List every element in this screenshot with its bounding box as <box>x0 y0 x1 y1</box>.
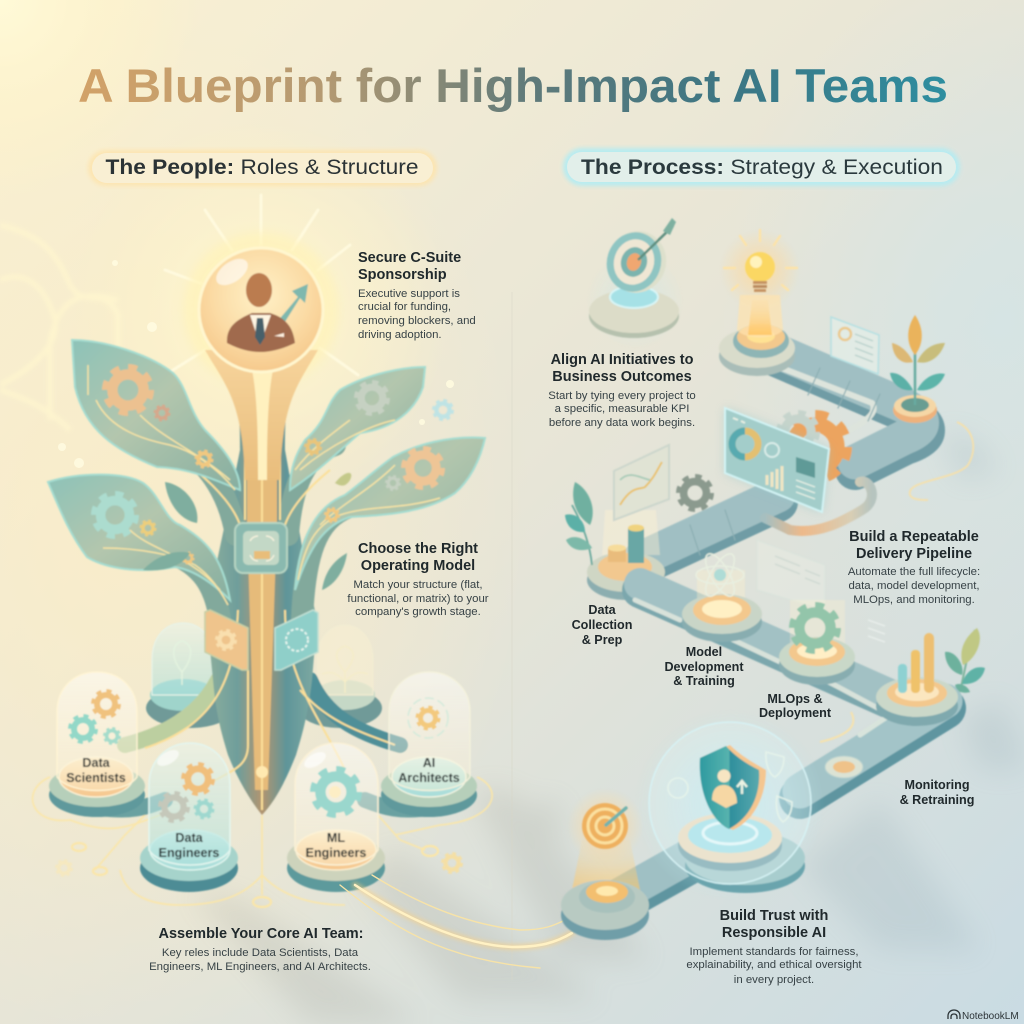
text: build trust with responsible ai <box>686 908 862 986</box>
pedestal: ai architects: AI <box>423 756 435 770</box>
shield icons in bubble <box>668 752 792 822</box>
notebooklm mark: NotebookLM <box>962 1011 1019 1022</box>
mlops pod <box>779 600 855 685</box>
trunk and roots <box>125 375 400 815</box>
base circuit lines <box>33 777 492 907</box>
text: align ai initiatives: a specific, measurable KPI <box>555 403 689 415</box>
text: choose the right operating model <box>347 541 489 618</box>
circuit gear right <box>443 854 461 872</box>
pedestal: data engineers: Engineers <box>159 846 219 860</box>
label: model development and training: & Training <box>673 674 735 688</box>
heading pill: the people: The People: Roles & Structure <box>106 156 418 179</box>
label: data collection and prep: Data <box>588 603 617 617</box>
text: build trust with responsible ai: in every project. <box>734 974 814 986</box>
data collection pod <box>565 482 665 600</box>
plant pod top <box>890 315 945 423</box>
label: model development and training: Model <box>686 645 722 659</box>
leaf branches <box>175 445 355 635</box>
text: secure c-suite sponsorship: Sponsorship <box>358 267 447 283</box>
pedestal connector bands <box>100 800 429 810</box>
pedestal: data engineers: Data <box>175 831 204 845</box>
target pod <box>561 840 649 940</box>
pedestal: ml engineers: ML <box>327 831 345 845</box>
text: choose the right operating model: Choose the Right <box>358 541 478 557</box>
pedestal: ai architects: Architects <box>398 771 460 785</box>
pedestal: data scientists: Data <box>82 756 111 770</box>
text: build a repeatable delivery pipeline: Build a Repeatable <box>849 529 979 545</box>
label: data collection and prep: & Prep <box>582 633 623 647</box>
text: build trust with responsible ai: Build Trust with <box>720 908 828 924</box>
label: mlops and deployment: MLOps & <box>767 692 823 706</box>
text: choose the right operating model: functional, or matrix) to your <box>347 593 489 605</box>
trunk circuit traces <box>145 390 395 810</box>
illustration: the process pipeline <box>561 218 985 940</box>
connector: glowing lines from team to process <box>340 875 572 968</box>
heading pill: the people <box>88 150 437 186</box>
belt: top run <box>722 344 925 470</box>
doc panel <box>831 317 879 374</box>
text: secure c-suite sponsorship: crucial for funding, <box>358 301 451 313</box>
text: assemble your core ai team: Assemble Your Core AI Team: <box>159 926 363 942</box>
belt: model mlops monitoring run <box>635 584 915 712</box>
chart panel <box>602 445 669 555</box>
pedestal: data engineers <box>140 743 238 892</box>
text: assemble your core ai team <box>149 926 371 973</box>
leaf: lower left <box>48 475 230 605</box>
text: build trust with responsible ai: explainability, and ethical oversight <box>686 959 862 971</box>
orange gear <box>784 416 846 478</box>
title: A Blueprint for High-Impact AI Teams <box>78 59 948 112</box>
text: align ai initiatives: before any data work begins. <box>549 417 695 429</box>
text: align ai initiatives: Align AI Initiatives to <box>551 352 694 368</box>
text: secure c-suite sponsorship: removing blockers, and <box>358 315 476 327</box>
back dome: sprout right <box>298 625 382 728</box>
text: secure c-suite sponsorship: Executive support is <box>358 288 460 300</box>
label: monitoring and retraining: Monitoring <box>904 778 970 792</box>
icon: growth arrow <box>277 284 308 325</box>
pedestal: ml engineers <box>287 743 385 892</box>
label: data collection and prep: Collection <box>572 618 632 632</box>
pedestal: ml engineers: Engineers <box>306 846 366 860</box>
pedestal: data scientists <box>49 672 145 817</box>
icon: light bulb <box>720 230 800 338</box>
root: right stream <box>310 680 400 745</box>
back dome: lightbulb left <box>146 623 234 728</box>
small side leaves <box>143 473 351 590</box>
label: model development and training: Development <box>664 660 744 674</box>
chip: right teal <box>275 610 318 670</box>
small disc on belt <box>825 756 863 778</box>
pedestal: data scientists: Scientists <box>66 771 126 785</box>
trunk node <box>256 766 268 778</box>
leaf: upper left <box>72 340 240 490</box>
model pod <box>682 550 762 642</box>
text: build a repeatable delivery pipeline: data, model development, <box>848 580 980 592</box>
text: build trust with responsible ai: Implement standards for fairness, <box>689 946 859 958</box>
text: build a repeatable delivery pipeline: Automate the full lifecycle: <box>848 566 980 578</box>
text: choose the right operating model: Match your structure (flat, <box>353 579 483 591</box>
text: build a repeatable delivery pipeline <box>848 529 980 606</box>
icon: executive silhouette <box>227 273 295 352</box>
sponsor orb <box>183 232 339 480</box>
chip: central <box>235 523 287 573</box>
text: build trust with responsible ai: Responsible AI <box>722 925 826 941</box>
arrow swoosh <box>820 712 853 742</box>
icon: glowing target <box>567 788 643 864</box>
glass bubble <box>649 722 811 884</box>
leaf: upper right <box>290 367 425 490</box>
pedestal: ai architects <box>381 672 477 817</box>
text: align ai initiatives <box>548 352 696 429</box>
bulb pod <box>719 324 795 376</box>
label: mlops and deployment: Deployment <box>759 706 832 720</box>
small dark gear <box>679 477 711 509</box>
icon: top target <box>587 218 683 348</box>
data panel faint <box>757 540 825 610</box>
text: assemble your core ai team: Engineers, ML Engineers, and AI Architects. <box>149 961 371 973</box>
icon: shield <box>700 745 766 830</box>
text: build a repeatable delivery pipeline: Delivery Pipeline <box>856 546 972 562</box>
circuit gear left <box>57 861 71 875</box>
sun rays <box>165 195 358 375</box>
heading pill: the process <box>563 148 960 186</box>
text: choose the right operating model: company's growth stage. <box>355 606 481 618</box>
back gear <box>780 414 816 450</box>
monitoring pod <box>868 620 985 726</box>
heading pill: the process: The Process: Strategy & Execution <box>581 156 943 179</box>
shield platform <box>635 710 825 900</box>
pipe: orange return <box>765 482 872 531</box>
leaf: lower right <box>295 437 485 590</box>
illustration: the people tree <box>33 195 492 907</box>
belt: dashboard to data <box>640 495 778 566</box>
text: build a repeatable delivery pipeline: MLOps, and monitoring. <box>853 594 975 606</box>
text: align ai initiatives: Start by tying every project to <box>548 390 696 402</box>
belt: return run <box>620 701 945 902</box>
floating gear <box>434 401 452 419</box>
text: secure c-suite sponsorship <box>358 250 476 341</box>
text: align ai initiatives: Business Outcomes <box>552 369 692 385</box>
root: left stream <box>125 680 218 745</box>
text: assemble your core ai team: Key reles include Data Scientists, Data <box>162 947 359 959</box>
label: monitoring and retraining: & Retraining <box>900 793 974 807</box>
text: choose the right operating model: Operating Model <box>361 558 475 574</box>
return curve <box>910 422 973 500</box>
dashboard panel <box>725 408 829 512</box>
text: secure c-suite sponsorship: driving adoption. <box>358 329 442 341</box>
text: secure c-suite sponsorship: Secure C-Suite <box>358 250 461 266</box>
chip: left orange <box>205 610 248 670</box>
